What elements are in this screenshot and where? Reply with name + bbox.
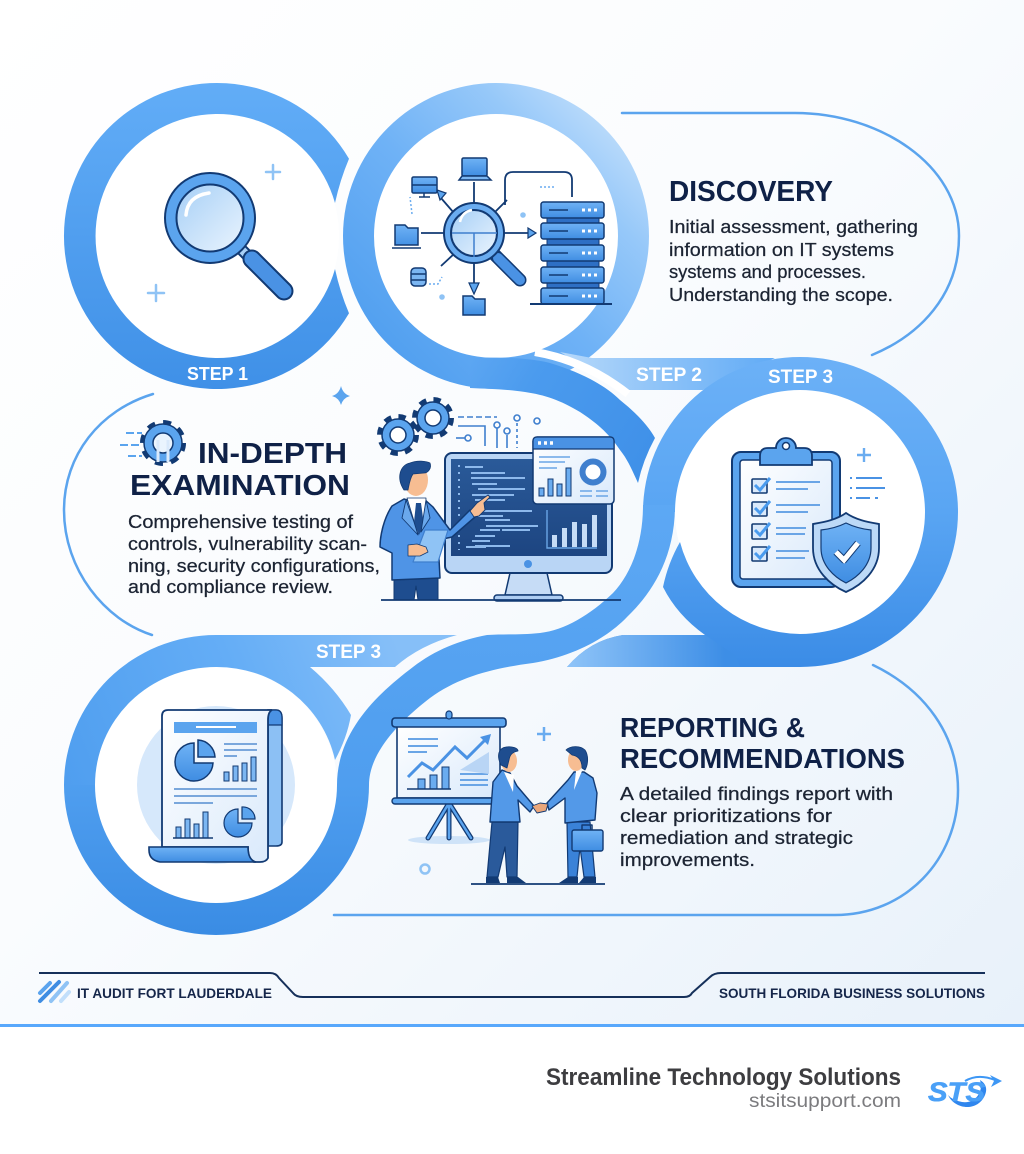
icon: magnifying glass xyxy=(165,173,284,291)
small circle mark xyxy=(420,864,430,874)
logo: STS: STS xyxy=(928,1077,985,1107)
icon part: folder left xyxy=(392,225,421,248)
icon part: folder bottom xyxy=(463,296,485,315)
white discs behind the icons xyxy=(95,114,925,903)
footer text left: IT AUDIT FORT LAUDERDALE xyxy=(77,985,272,1001)
text: in-depth description: Comprehensive testing of xyxy=(128,511,354,532)
person right xyxy=(532,747,603,883)
text: reporting description: improvements. xyxy=(620,849,755,870)
band: step 2 to step 3 connector xyxy=(470,358,655,483)
illustration: analyst at monitor xyxy=(380,401,621,601)
shield xyxy=(813,513,879,592)
floor line xyxy=(471,883,605,885)
ring: step 2 circle xyxy=(343,83,649,389)
analyst figure xyxy=(380,461,490,600)
brand name: Streamline Technology Solutions xyxy=(546,1064,901,1091)
footer blue bar xyxy=(0,1024,1024,1027)
heading: reporting and recommendations xyxy=(620,712,905,774)
heading: discovery: DISCOVERY xyxy=(669,176,833,208)
label: step 3 lower: STEP 3 xyxy=(316,642,381,663)
panel outline: in-depth examination xyxy=(64,394,153,635)
icon part: database xyxy=(411,268,426,286)
brand url: stsitsupport.com xyxy=(749,1090,901,1112)
text: discovery description: Initial assessment, gathering xyxy=(669,216,918,237)
icon part: laptop xyxy=(459,158,491,180)
floor line xyxy=(381,599,621,601)
popup dashboard xyxy=(533,437,614,504)
icon: network audit hub and server xyxy=(392,158,612,315)
text: reporting description xyxy=(620,783,893,870)
heading: in-depth examination: IN-DEPTH xyxy=(198,438,347,470)
briefcase xyxy=(572,825,603,851)
text: discovery description xyxy=(669,216,918,305)
ring: step 1 xyxy=(64,83,349,389)
icon: clipboard with shield xyxy=(732,438,885,592)
icon part: lens xyxy=(444,203,520,280)
text: in-depth description xyxy=(128,511,380,597)
icon: footer stripes xyxy=(40,982,69,1001)
person left xyxy=(486,747,534,883)
logo: STS xyxy=(928,1075,1002,1107)
text: in-depth description: and compliance review. xyxy=(128,576,333,597)
presentation board xyxy=(392,711,506,844)
monitor xyxy=(445,453,612,601)
heading: in-depth examination xyxy=(130,438,350,502)
icon: gear heading xyxy=(120,423,183,463)
lower white brand area xyxy=(0,1024,1024,1154)
heading: in-depth examination: EXAMINATION xyxy=(130,470,350,502)
plus mark xyxy=(537,727,551,741)
text: discovery description: Understanding the scope. xyxy=(669,284,893,305)
text: discovery description: systems and processes. xyxy=(669,261,866,282)
ring: step 3 xyxy=(567,357,958,667)
text: reporting description: remediation and strategic xyxy=(620,827,853,848)
heading: reporting and recommendations: REPORTING & xyxy=(620,712,805,743)
band: step 2 wedge xyxy=(560,352,775,390)
heading: reporting and recommendations: RECOMMENDATIONS xyxy=(620,743,905,774)
footer divider line xyxy=(39,973,985,997)
text: reporting description: clear prioritizations for xyxy=(620,805,832,826)
gap between wedge and main band xyxy=(535,352,628,394)
footer text right: SOUTH FLORIDA BUSINESS SOLUTIONS xyxy=(719,985,985,1001)
text: discovery description: information on IT systems xyxy=(669,239,894,260)
label: step 2: STEP 2 xyxy=(636,365,702,386)
circuit lines xyxy=(456,415,540,448)
icon: sparkle plus marks xyxy=(148,165,280,301)
panel outline: discovery xyxy=(622,113,959,355)
icon part: dots xyxy=(439,212,526,300)
text: reporting description: A detailed findings report with xyxy=(620,783,893,804)
icon part: server stack xyxy=(530,202,612,304)
icon: report document xyxy=(137,706,295,864)
ring: step 4 lower and S-curve band xyxy=(64,505,675,935)
band: step 3 lower fade xyxy=(567,635,740,667)
panel outline: reporting xyxy=(334,665,958,915)
icon: sparkle xyxy=(332,386,350,405)
side marks xyxy=(857,448,871,462)
ring: step 4 upper band and tail xyxy=(64,635,457,785)
icon part: monitor small xyxy=(412,177,437,197)
label: step 3 upper: STEP 3 xyxy=(768,367,833,388)
label: step 1: STEP 1 xyxy=(187,363,248,384)
illustration: presentation and handshake xyxy=(392,711,605,884)
text: in-depth description: ning, security configurations, xyxy=(128,555,380,576)
gears xyxy=(381,401,450,452)
text: in-depth description: controls, vulnerability scan- xyxy=(128,533,367,554)
